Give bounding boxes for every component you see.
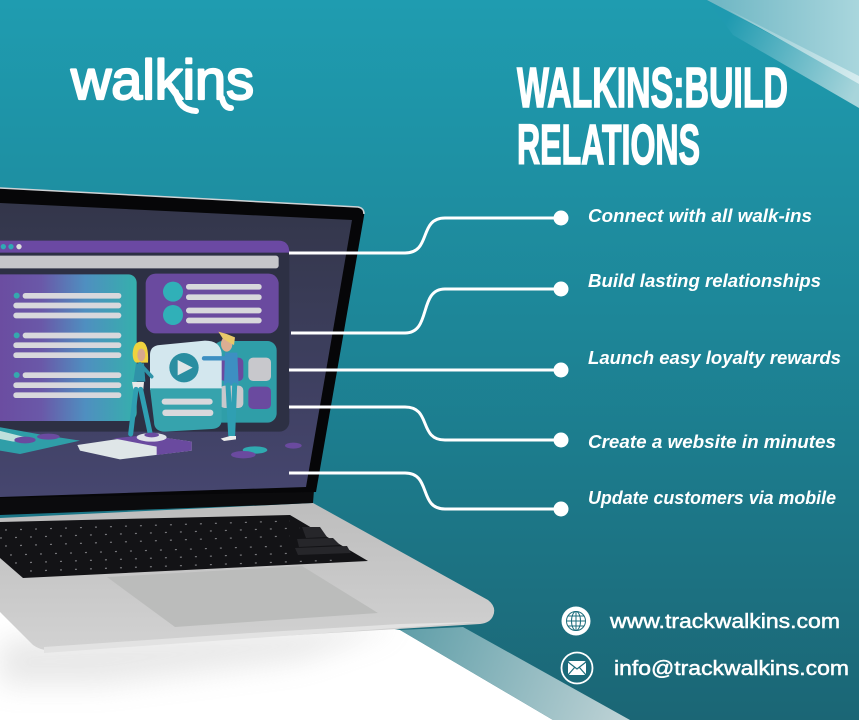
- laptop: [0, 188, 494, 653]
- web window: [0, 241, 289, 432]
- platforms: [0, 427, 302, 459]
- contact website: www.trackwalkins.com: [609, 611, 840, 633]
- woman figure: [131, 342, 152, 434]
- tile card: [213, 341, 277, 423]
- title: RELATIONS: [517, 113, 700, 177]
- feature list: Update customers via mobile: [588, 488, 836, 508]
- screen illustration: [0, 241, 302, 459]
- connector lines: [289, 218, 561, 509]
- trackpad: [107, 566, 378, 627]
- accent band bottom: [400, 627, 630, 720]
- accent band top right: [707, 0, 859, 108]
- address bar: [0, 256, 279, 268]
- video card: [150, 341, 222, 432]
- title: [517, 56, 788, 177]
- logo: walkins: [70, 48, 254, 111]
- feature list: Create a website in minutes: [588, 432, 836, 452]
- top right card: [146, 274, 279, 333]
- hinge lid edge: [0, 490, 314, 515]
- keyboard: [0, 515, 368, 578]
- connector dots: [554, 210, 568, 516]
- base front lip: [44, 622, 480, 653]
- feature list: [588, 206, 841, 508]
- left card: [0, 274, 137, 421]
- feature list: Build lasting relationships: [588, 271, 821, 291]
- contact email: info@trackwalkins.com: [614, 658, 849, 680]
- icon: globe: [562, 606, 590, 636]
- icon: envelope: [562, 652, 592, 684]
- laptop screen: [0, 203, 352, 497]
- laptop base: [0, 503, 494, 650]
- feature list: Launch easy loyalty rewards: [588, 348, 841, 368]
- white corner: [0, 560, 553, 720]
- title bar: [0, 241, 289, 253]
- man figure: [204, 332, 239, 441]
- laptop lid: [0, 188, 364, 498]
- shadow under laptop: [0, 625, 400, 685]
- feature list: Connect with all walk-ins: [588, 206, 812, 226]
